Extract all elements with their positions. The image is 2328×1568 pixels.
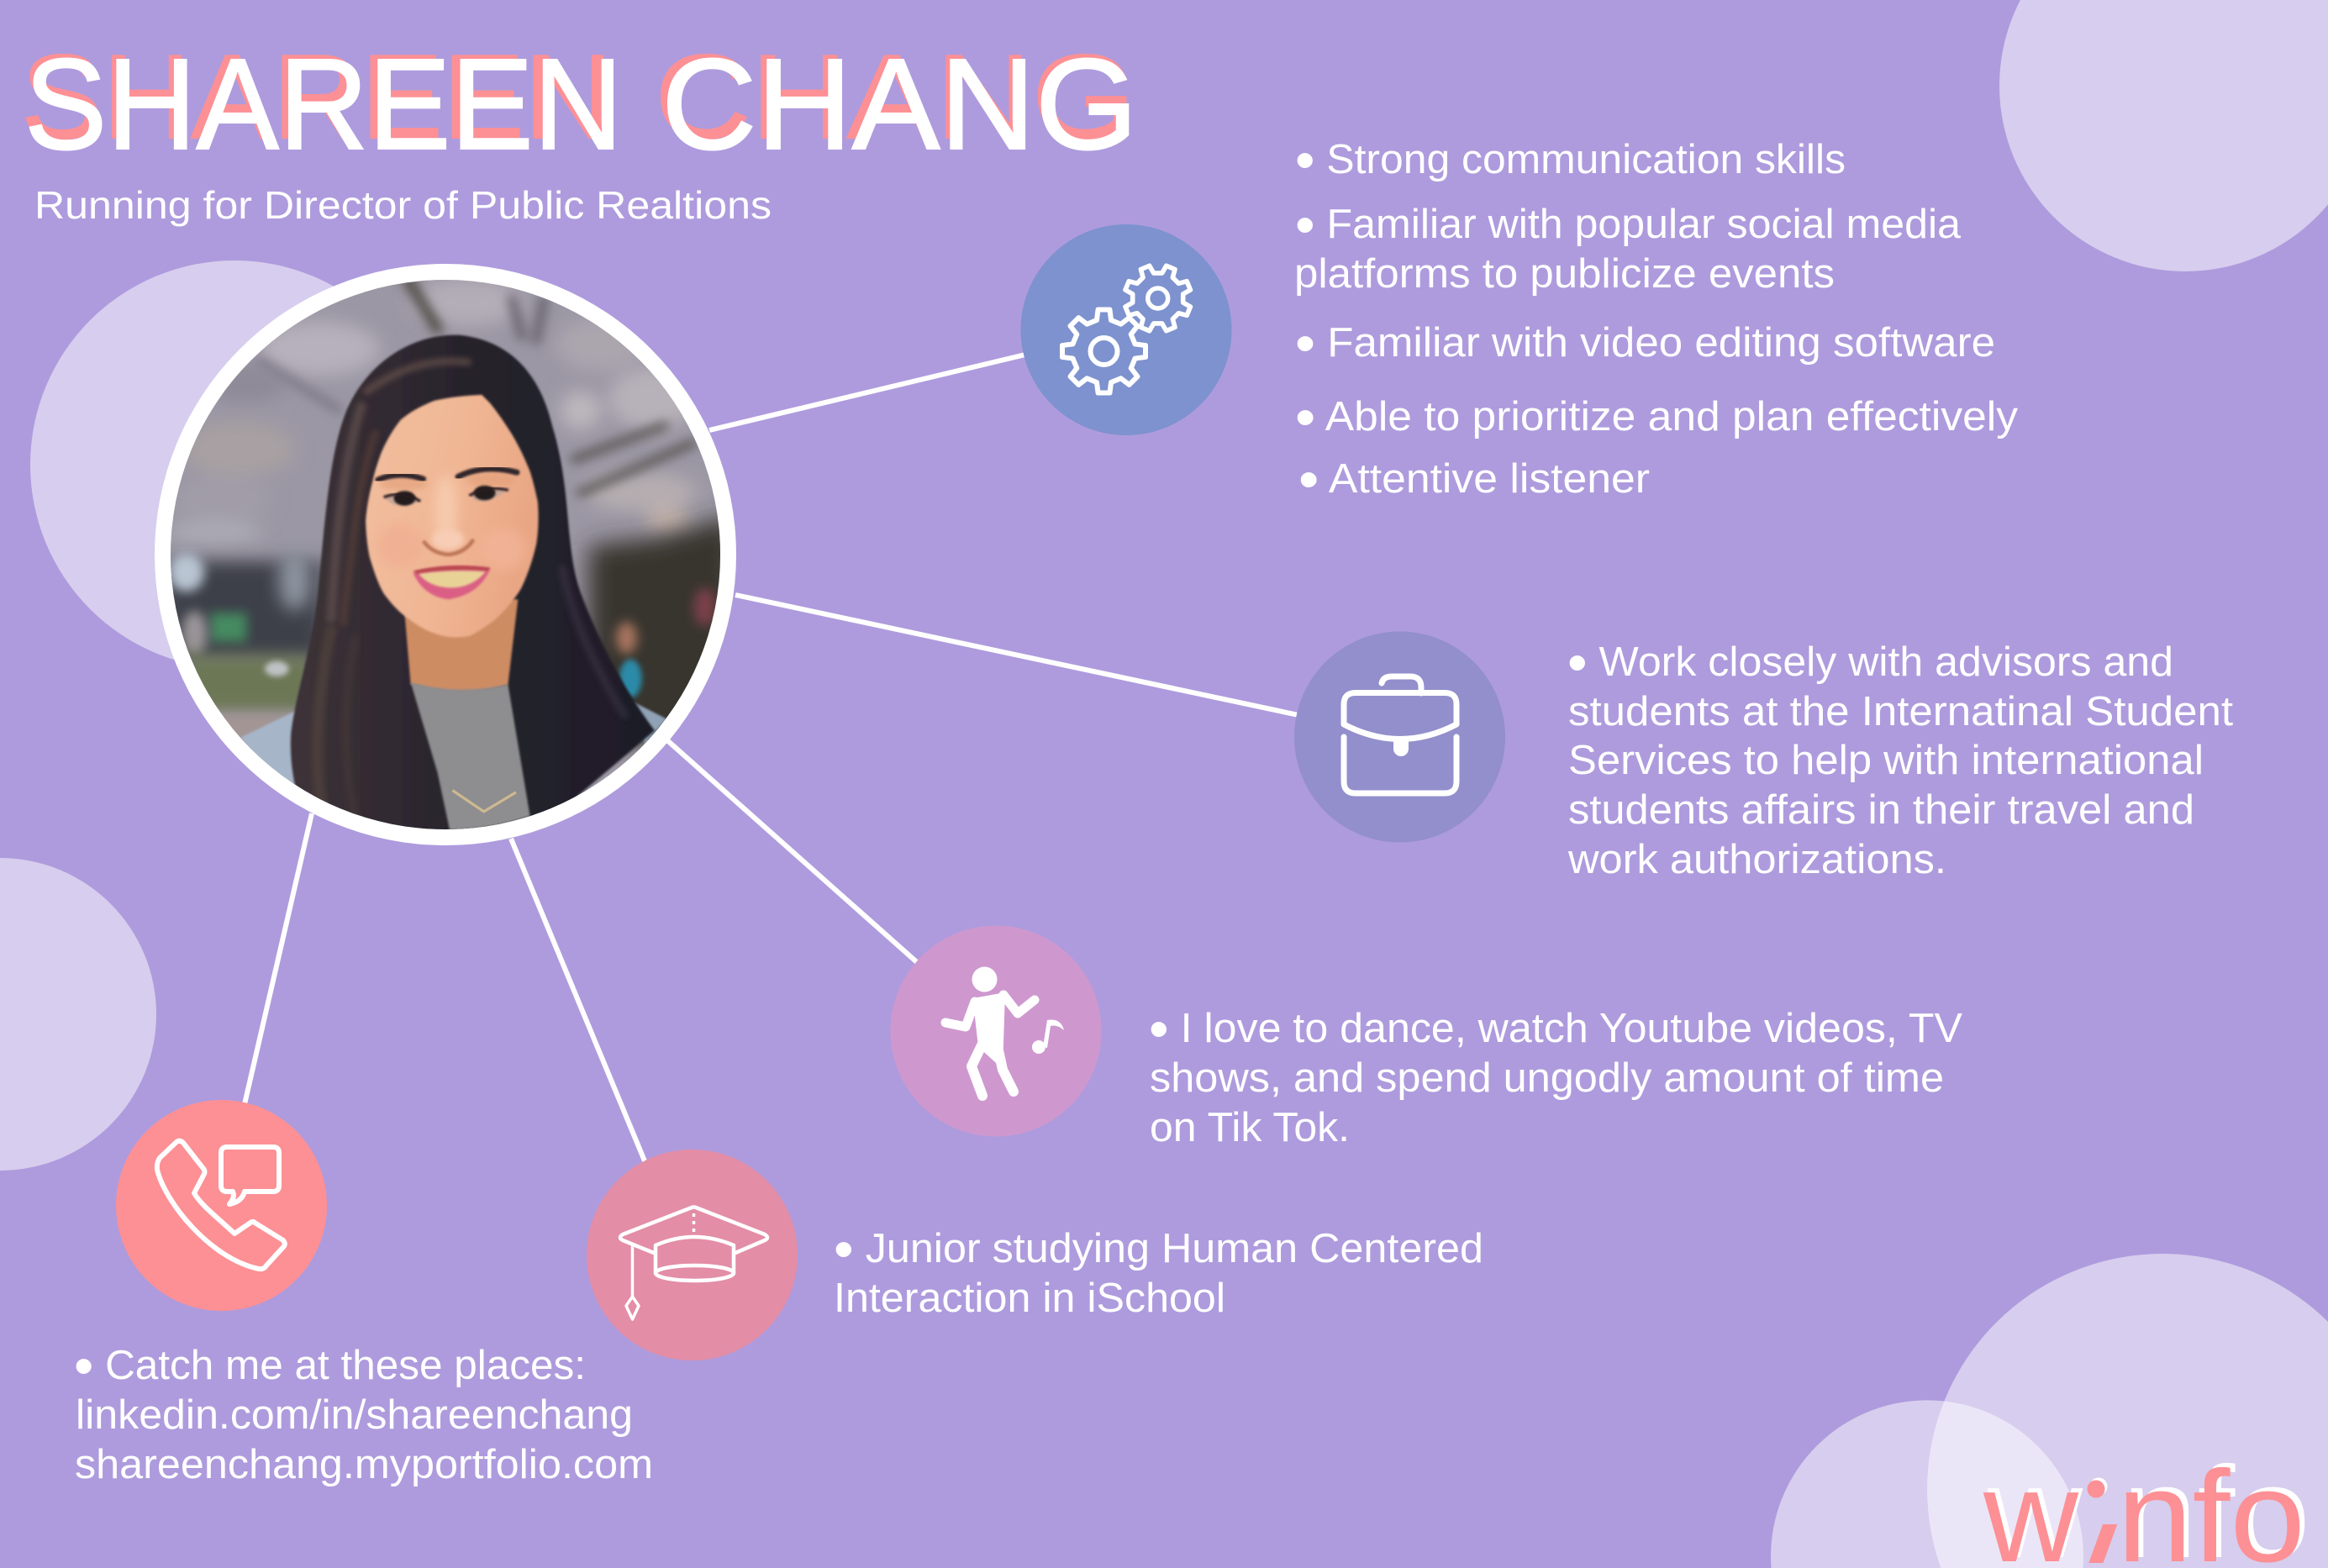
hobbies text: I love to dance, watch Youtube videos, TV [1169,1006,1962,1051]
logo: winfo [1983,1462,2304,1563]
education text: Junior studying Human Centered [854,1226,1483,1271]
skills list: • [1298,448,1319,510]
skills list: • [1295,386,1315,448]
education text: Interaction in iSchool [834,1276,1225,1321]
contact text: shareenchang.myportfolio.com [75,1442,653,1487]
decorative circle: top right [1999,0,2328,271]
skills list: • [1295,129,1315,191]
contact text: Catch me at these places: [93,1343,586,1388]
face [366,395,539,638]
title: CHANG [655,30,1135,164]
experience text: • [1567,631,1588,693]
jacket [240,702,666,792]
hair strands [317,361,624,819]
skills list [1294,129,2019,510]
skills list: Attentive listener [1319,456,1650,502]
subtitle: Running for Director of Public Realtions [34,183,772,227]
hobbies text: on Tik Tok. [1150,1105,1350,1150]
experience text [1567,631,2233,882]
neck [403,599,518,692]
necklace [452,791,516,812]
decorative circle: bottom right small [1771,1400,2083,1568]
experience text: students at the Internatinal Student [1568,689,2233,734]
title: CHANG [661,32,1138,176]
skills list: Strong communication skills [1315,137,1846,182]
decorative circle: left edge [0,858,156,1171]
experience text: students affairs in their travel and [1568,787,2194,833]
experience text: Work closely with advisors and [1588,639,2173,685]
contact text: • [74,1334,93,1397]
hobbies text [1149,997,1962,1150]
skills list: • [1295,312,1315,374]
icon: graduation cap [587,1150,798,1360]
icon: gears [1020,224,1232,435]
skills list: Familiar with popular social media [1315,202,1962,247]
hobbies text: shows, and spend ungodly amount of time [1150,1055,1944,1101]
title: SHAREEN [21,30,613,164]
photo background [171,280,720,829]
title [21,30,1138,176]
contact text [74,1334,653,1487]
experience text: Services to help with international [1568,738,2204,783]
education text [834,1218,1483,1321]
decorative circle: bottom right large [1927,1254,2328,1568]
skills list: • [1295,193,1315,255]
connector lines [245,355,1298,1163]
contact text: linkedin.com/in/shareenchang [76,1392,633,1438]
sweater [411,682,530,830]
facial features [377,469,526,599]
hair [291,335,655,834]
decorative circle: behind photo [30,260,439,669]
skills list: Able to prioritize and plan effectively [1315,394,2019,439]
portrait photo [150,264,737,850]
icon: dancer [891,926,1101,1136]
title: SHAREEN [24,32,623,176]
skills list: Familiar with video editing software [1315,320,1995,366]
experience text: work authorizations. [1567,837,1946,882]
skills list: platforms to publicize events [1294,251,1835,297]
education text: • [834,1218,854,1280]
icon: phone and speech bubble [116,1100,327,1311]
icon: briefcase [1294,632,1505,842]
hobbies text: • [1149,997,1169,1060]
